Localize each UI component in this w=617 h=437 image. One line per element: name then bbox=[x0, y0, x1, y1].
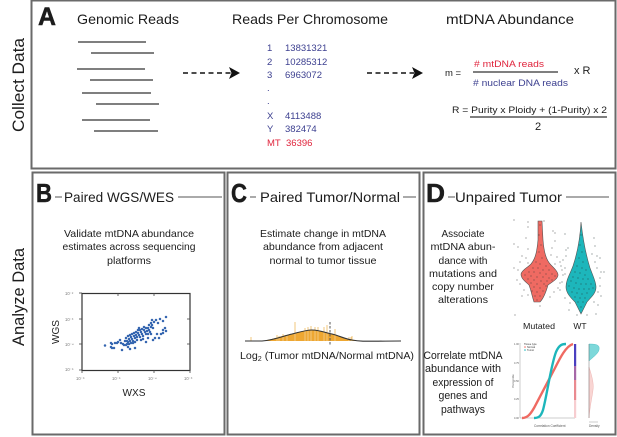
row label: Analyze Data: Analyze Data bbox=[9, 247, 28, 346]
scatter plot: WGS vs WXS: 10⁻⁴ bbox=[65, 342, 74, 347]
formula: m: # nuclear DNA reads bbox=[473, 78, 568, 89]
description B: platforms bbox=[107, 255, 151, 267]
description: associate: dance with bbox=[438, 255, 488, 267]
scatter plot: WGS vs WXS: 10⁻⁶ bbox=[76, 376, 85, 381]
reads per chromosome table bbox=[267, 43, 327, 149]
cumulative correlation chart: 0.25 bbox=[514, 398, 519, 401]
description C: abundance from adjacent bbox=[263, 241, 383, 253]
description: correlate: abundance with bbox=[425, 363, 501, 375]
density side panel bbox=[589, 344, 599, 361]
cumulative correlation chart bbox=[511, 343, 600, 428]
description C: normal to tumor tissue bbox=[270, 255, 377, 267]
description: correlate: pathways bbox=[441, 404, 485, 416]
arrow: reads to counts bbox=[183, 67, 240, 79]
axis label: log2 ratio: (Tumor mtDNA/Normal mtDNA) bbox=[262, 350, 414, 362]
description: associate: mutations and bbox=[429, 268, 497, 280]
scatter points bbox=[105, 317, 166, 350]
gene strip bbox=[574, 344, 576, 366]
scatter plot: WGS vs WXS: 10⁻² bbox=[65, 291, 74, 296]
formula: R bbox=[452, 105, 607, 133]
description: associate bbox=[429, 228, 497, 306]
row label: Collect Data: Collect Data bbox=[9, 37, 28, 132]
description: correlate: expression of bbox=[432, 377, 494, 389]
violin plot: WT bbox=[560, 222, 604, 315]
reads per chromosome table: 2 bbox=[267, 57, 272, 68]
scatter plot: WGS vs WXS: 10⁻³ bbox=[184, 376, 193, 381]
description B bbox=[62, 228, 196, 267]
heading: Paired WGS/WES: Paired WGS/WES bbox=[64, 189, 174, 205]
heading: Paired Tumor/Normal: Paired Tumor/Normal bbox=[260, 189, 400, 205]
heading: mtDNA Abundance: mtDNA Abundance bbox=[446, 11, 574, 27]
axis label: WXS: WXS bbox=[122, 387, 146, 399]
reads per chromosome table: 6963072 bbox=[285, 70, 322, 81]
axis label: log2 ratio: 2 bbox=[258, 356, 262, 363]
violin plot: mutated bbox=[514, 220, 565, 315]
panel letter B: B bbox=[36, 178, 52, 208]
cumulative correlation chart: Correlation Coefficient bbox=[534, 424, 566, 428]
arrow: counts to abundance bbox=[367, 67, 423, 79]
axis label: WGS: WGS bbox=[50, 320, 62, 344]
formula: m: x R bbox=[574, 65, 591, 77]
chart legend: Tumor bbox=[527, 349, 534, 352]
cumulative correlation chart: 1.00 bbox=[514, 343, 519, 346]
description C bbox=[260, 228, 386, 267]
axis label: log2 ratio: Log bbox=[240, 350, 258, 362]
heading: Reads Per Chromosome: Reads Per Chromosome bbox=[232, 11, 388, 27]
panel letter A: A bbox=[38, 3, 56, 31]
reads per chromosome table: 1 bbox=[267, 43, 272, 54]
reads per chromosome table: 10285312 bbox=[285, 57, 327, 68]
genomic read lines bbox=[77, 42, 159, 131]
formula: R: R = Purity x Ploidy + (1-Purity) x 2 bbox=[452, 105, 607, 116]
description C: Estimate change in mtDNA bbox=[260, 228, 386, 240]
panel B: paired WGS/WES bbox=[32, 172, 224, 434]
chart legend bbox=[524, 343, 537, 352]
cumulative correlation chart: 0.75 bbox=[514, 362, 519, 365]
formula: m: # mtDNA reads bbox=[474, 59, 544, 70]
cumulative correlation chart: 0.50 bbox=[514, 380, 519, 383]
panel A: collect data bbox=[32, 0, 616, 168]
reads per chromosome table: 4113488 bbox=[285, 111, 321, 122]
cumulative correlation chart: Density bbox=[589, 424, 600, 428]
reads per chromosome table: MT bbox=[267, 138, 281, 149]
panel D: unpaired tumor bbox=[424, 172, 616, 434]
heading: Unpaired Tumor: Unpaired Tumor bbox=[455, 189, 562, 205]
description: associate: Associate bbox=[442, 228, 485, 240]
description: correlate bbox=[424, 350, 503, 416]
reads per chromosome table: 13831321 bbox=[285, 43, 327, 54]
scatter plot: WGS vs WXS: 10⁻⁴ bbox=[148, 376, 157, 381]
density histogram bbox=[245, 322, 401, 345]
scatter plot: WGS vs WXS: 10⁻⁵ bbox=[65, 367, 74, 372]
formula: R: 2 bbox=[535, 121, 541, 133]
description: associate: copy number bbox=[432, 281, 495, 293]
description B: Validate mtDNA abundance bbox=[64, 228, 194, 240]
reads per chromosome table: . bbox=[267, 83, 270, 94]
reads per chromosome table: 36396 bbox=[286, 138, 312, 149]
scatter plot: WGS vs WXS bbox=[65, 291, 193, 381]
reads per chromosome table: . bbox=[267, 96, 270, 107]
reads per chromosome table: 382474 bbox=[285, 124, 317, 135]
chart legend: Tissue type bbox=[524, 343, 537, 346]
description: associate: mtDNA abun- bbox=[430, 241, 496, 253]
description: correlate: genes and bbox=[438, 390, 488, 402]
scatter plot: WGS vs WXS: 10⁻³ bbox=[65, 317, 74, 322]
scatter plot: WGS vs WXS: 10⁻⁵ bbox=[112, 376, 121, 381]
cumulative correlation chart: Percentile bbox=[511, 374, 515, 388]
violin label: WT: WT bbox=[573, 321, 587, 331]
description: associate: alterations bbox=[438, 294, 488, 306]
reads per chromosome table: 3 bbox=[267, 70, 272, 81]
description: correlate: Correlate mtDNA bbox=[424, 350, 503, 362]
panel letter D: D bbox=[426, 178, 445, 208]
formula: m: m = bbox=[445, 68, 462, 79]
description B: estimates across sequencing bbox=[62, 241, 196, 253]
reads per chromosome table: X bbox=[267, 111, 274, 122]
panel letter C: C bbox=[231, 178, 247, 208]
cumulative correlation chart: 0.00 bbox=[514, 417, 519, 420]
reads per chromosome table: Y bbox=[267, 124, 274, 135]
formula: m bbox=[445, 59, 591, 89]
panel C: paired tumor/normal bbox=[228, 172, 420, 434]
chart legend: Normal bbox=[527, 346, 536, 349]
heading: Genomic Reads: Genomic Reads bbox=[77, 11, 179, 27]
violin label: Mutated: Mutated bbox=[523, 321, 555, 331]
